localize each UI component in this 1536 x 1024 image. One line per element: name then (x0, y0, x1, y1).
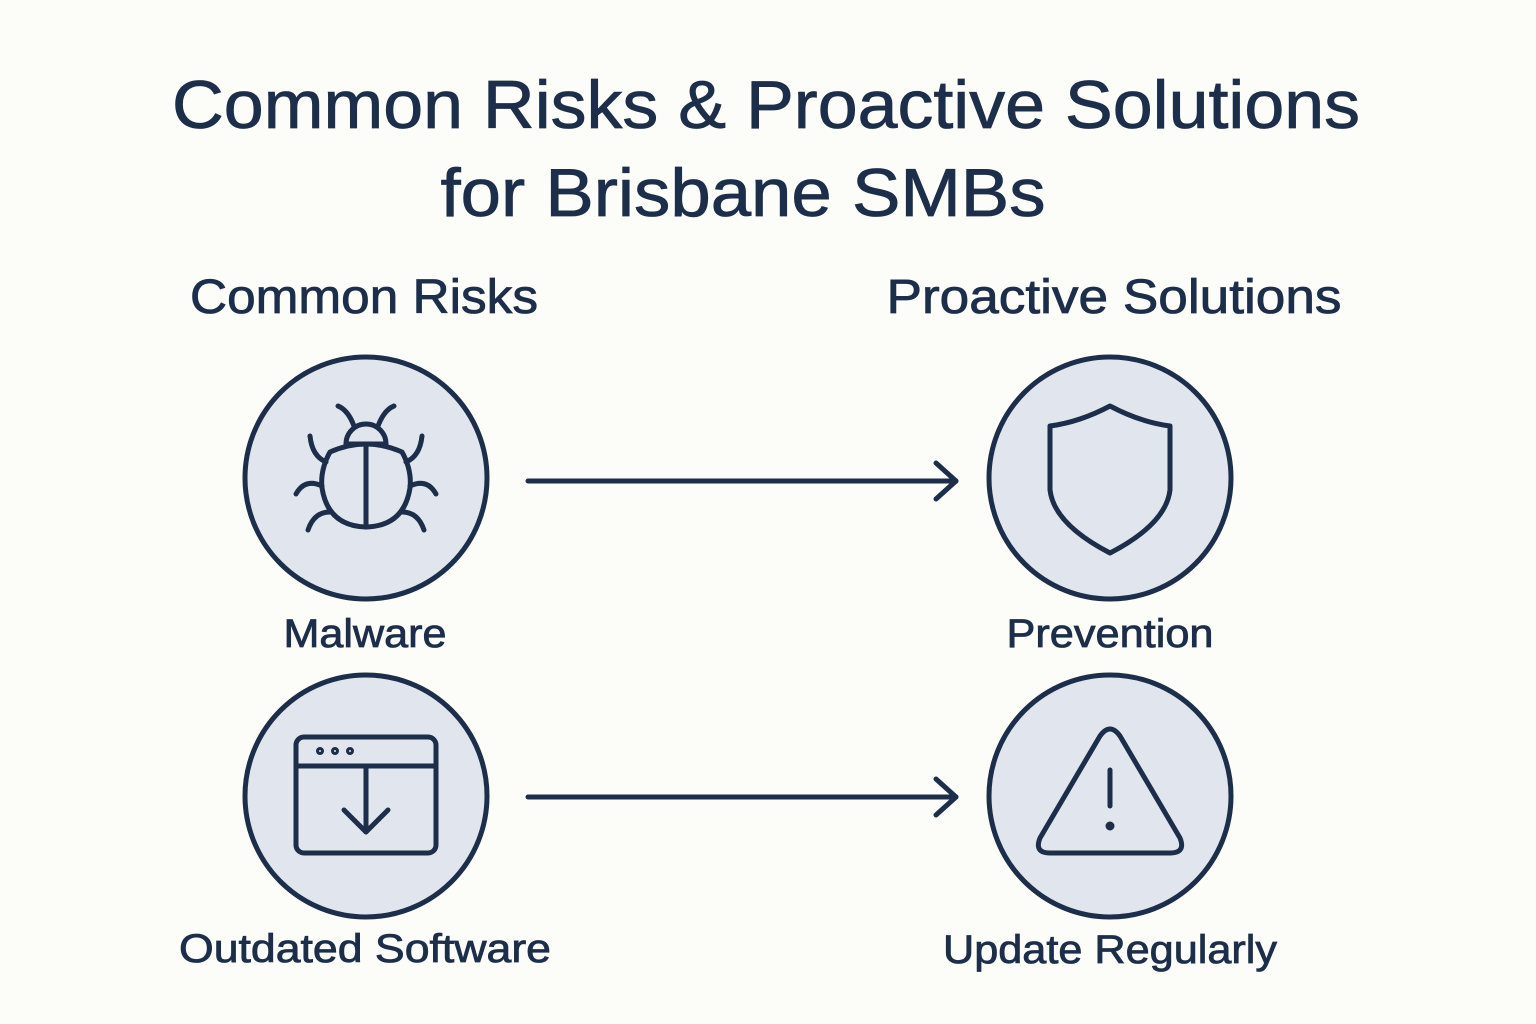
label: prevention: Prevention (1006, 612, 1214, 656)
label: malware: Malware (284, 612, 446, 656)
icon: update warning (989, 675, 1231, 917)
title: for Brisbane SMBs (440, 155, 1046, 231)
arrow: malware to prevention (528, 463, 956, 499)
title (172, 67, 1360, 231)
title: Common Risks & Proactive Solutions (172, 67, 1360, 143)
icon: malware bug (245, 357, 487, 599)
heading: proactive solutions: Proactive Solutions (886, 271, 1342, 324)
arrow: outdated software to update (528, 779, 956, 815)
label: update regularly: Update Regularly (943, 928, 1277, 972)
label: outdated software: Outdated Software (179, 927, 551, 971)
heading: common risks: Common Risks (190, 271, 538, 324)
icon: prevention shield (989, 357, 1231, 599)
icon: outdated software (245, 675, 487, 917)
